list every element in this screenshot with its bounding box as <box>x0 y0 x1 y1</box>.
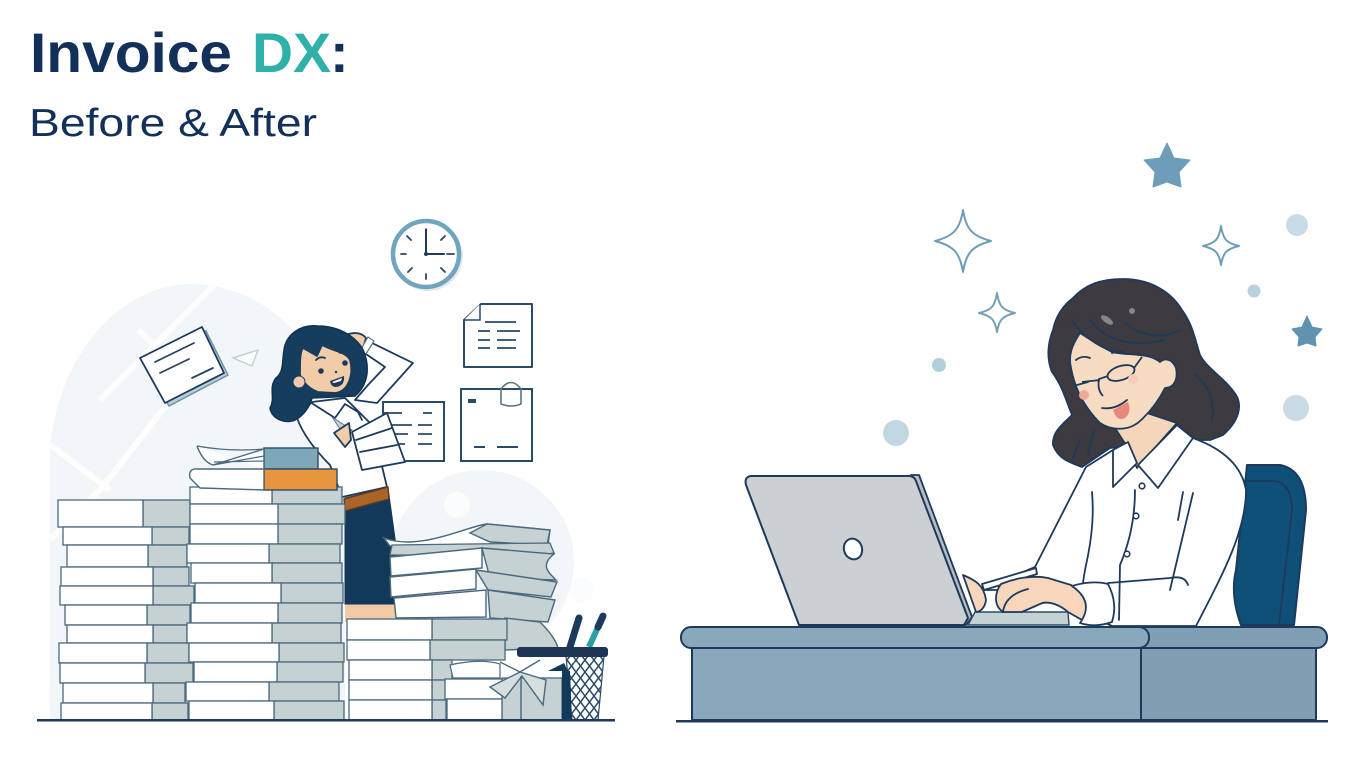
hand on head <box>345 333 366 352</box>
mouth <box>1113 402 1129 419</box>
hair strands <box>1072 320 1213 460</box>
panel: before <box>37 221 615 722</box>
ground line: after <box>676 720 1328 722</box>
mouth <box>330 376 344 387</box>
belt <box>344 487 389 511</box>
binders on middle stack <box>190 446 337 490</box>
stack of files: right upper <box>384 524 558 650</box>
shirt seams <box>1083 490 1193 620</box>
stack of files: middle <box>186 487 345 720</box>
icon: document behind person <box>383 402 444 461</box>
title: : <box>330 21 349 84</box>
hands on keyboard <box>963 568 1114 625</box>
glasses <box>1082 357 1142 396</box>
leg <box>345 603 396 622</box>
title <box>30 21 349 84</box>
held paper <box>352 413 405 470</box>
icon: paper scrap <box>233 350 258 366</box>
hair <box>270 326 367 422</box>
face <box>1070 333 1177 429</box>
icon: floating note <box>140 327 228 406</box>
neck <box>1115 413 1177 468</box>
raised arm <box>355 340 413 403</box>
icon: pen holder <box>517 616 608 720</box>
shirt <box>981 438 1246 626</box>
cuff <box>1072 582 1114 625</box>
icon: document top <box>464 304 532 367</box>
title: Invoice <box>30 21 232 84</box>
character: happy woman <box>981 279 1246 626</box>
panel: after <box>676 143 1328 722</box>
ground line: before <box>37 719 615 722</box>
icon: big star <box>1144 143 1190 187</box>
logo <box>841 536 865 562</box>
character: stressed woman <box>270 326 413 622</box>
icon: clock <box>393 221 463 291</box>
eye <box>1076 352 1127 385</box>
icon: small star <box>1292 316 1322 346</box>
stack of files: right lower <box>347 619 507 720</box>
background blobs <box>50 284 594 720</box>
hair <box>1048 279 1239 467</box>
title: DX <box>252 21 331 84</box>
laptop <box>746 475 1069 625</box>
decorative stars and dots <box>883 143 1322 446</box>
icon: sparkle right <box>1203 226 1239 265</box>
gift box of files <box>445 660 562 720</box>
skirt <box>345 488 398 604</box>
collar <box>1113 442 1137 487</box>
collar and tie <box>310 402 362 420</box>
face <box>300 345 351 393</box>
shirt <box>297 398 387 497</box>
chair <box>1234 465 1306 625</box>
keyboard <box>968 612 1069 625</box>
cheeks <box>1079 390 1089 400</box>
stack of files: left <box>58 500 194 720</box>
desk <box>681 627 1327 720</box>
buttons <box>1124 483 1145 557</box>
icon: sparkle left <box>979 293 1015 332</box>
icon: clipboard document <box>461 382 532 461</box>
icon: big sparkle <box>935 210 991 272</box>
subtitle: Before & After <box>29 102 317 145</box>
